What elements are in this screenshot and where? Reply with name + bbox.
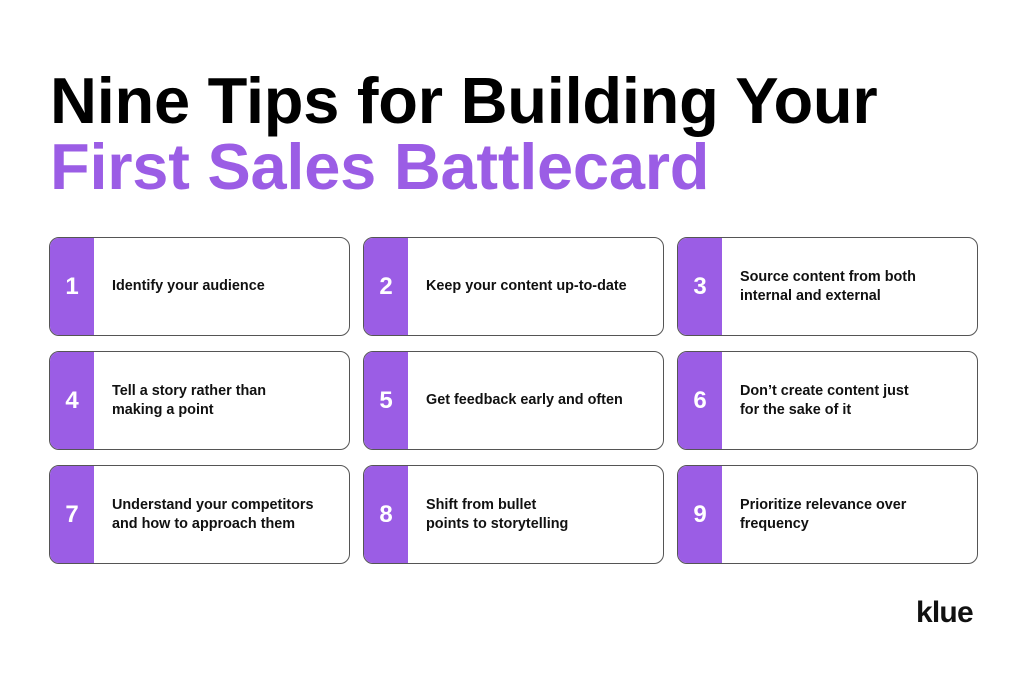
card 7: and how to approach them <box>112 516 295 532</box>
card 7: 7 <box>65 500 79 528</box>
card 8 <box>363 465 664 564</box>
card 6 <box>677 351 978 450</box>
title <box>50 64 877 203</box>
card 4: 4 <box>65 386 79 414</box>
card 2 <box>363 237 664 336</box>
card 3 <box>677 237 978 336</box>
card 2: Keep your content up-to-date <box>426 278 627 294</box>
card 1 <box>49 237 350 336</box>
card 9: 9 <box>693 500 707 528</box>
card 6: for the sake of it <box>740 402 851 418</box>
card 5 <box>363 351 664 450</box>
card 5: 5 <box>379 386 393 414</box>
card 4: making a point <box>112 402 214 418</box>
card 6: 6 <box>693 386 707 414</box>
logo: klue: klue <box>916 596 973 629</box>
card 9 <box>677 465 978 564</box>
card 1: 1 <box>65 272 79 300</box>
card 8: Shift from bullet <box>426 496 536 512</box>
card 5: Get feedback early and often <box>426 392 623 408</box>
card 7 <box>49 465 350 564</box>
card 3: internal and external <box>740 288 881 304</box>
card 3: Source content from both <box>740 268 916 284</box>
card 3: 3 <box>693 272 707 300</box>
card 9: frequency <box>740 516 809 532</box>
card 9: Prioritize relevance over <box>740 496 906 512</box>
card 8: 8 <box>379 500 393 528</box>
card 4 <box>49 351 350 450</box>
card 2: 2 <box>379 272 393 300</box>
card 1: Identify your audience <box>112 278 265 294</box>
card 4: Tell a story rather than <box>112 382 266 398</box>
title line 2: First Sales Battlecard <box>50 130 709 203</box>
card 8: points to storytelling <box>426 516 568 532</box>
card 6: Don’t create content just <box>740 382 909 398</box>
card 7: Understand your competitors <box>112 496 314 512</box>
title line 1: Nine Tips for Building Your <box>50 64 877 137</box>
